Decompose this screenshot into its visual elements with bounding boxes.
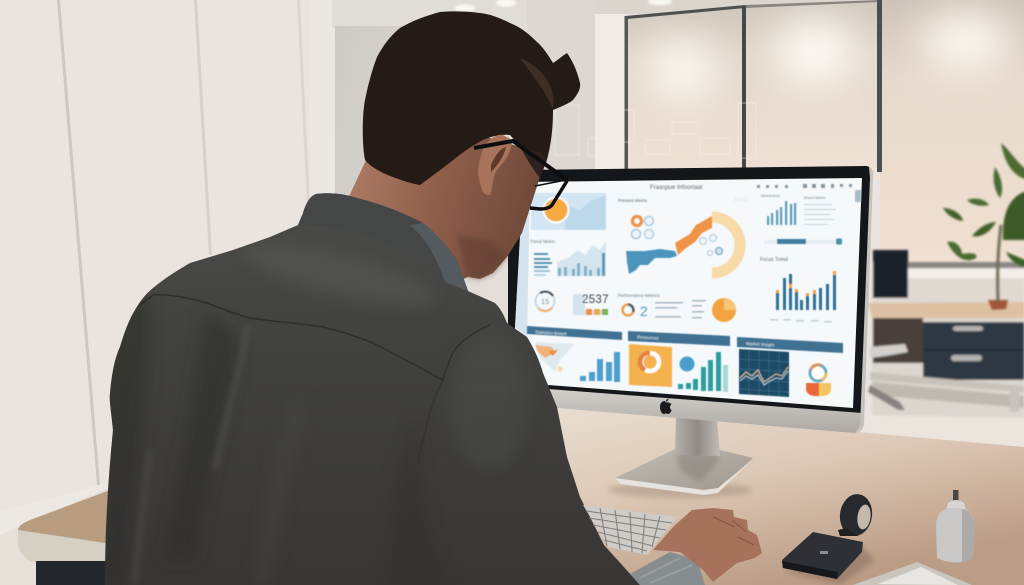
scrollbar	[855, 190, 861, 202]
glasses	[474, 141, 567, 209]
stand base	[615, 448, 753, 493]
icon: potted plant	[943, 143, 1024, 310]
panel: right stacked bar chart: Focus Trend	[760, 257, 788, 263]
desk surface	[18, 403, 1024, 585]
person	[105, 11, 705, 585]
ear	[478, 135, 512, 195]
device: dark power bank and ring stand	[782, 492, 875, 585]
left desk	[18, 490, 112, 548]
panel: orange donut and teal bars: Resources	[637, 335, 659, 341]
panel: central flow chart with ring: Present Meets	[618, 198, 648, 203]
panel: map and blue bars	[527, 326, 622, 382]
panel: top-right bar chart and progress	[761, 194, 842, 244]
hair	[363, 11, 580, 185]
stand neck	[675, 415, 720, 456]
panel: gauge and KPI number: 2537	[582, 294, 609, 306]
dashboard title: Fraaspue Infoortaat	[650, 185, 703, 191]
panel: right stacked bar chart	[760, 257, 836, 322]
panel: central flow chart with ring	[618, 197, 748, 274]
background room: desk, cabinet, monitor, chair	[868, 250, 1024, 448]
shirt shading folds	[105, 202, 424, 581]
panel: orange donut and teal bars	[628, 331, 730, 392]
sleeve cuff	[630, 552, 705, 585]
windows with dark frames	[624, 0, 1024, 270]
toolbar icons	[757, 184, 852, 188]
panel: map and blue bars: Statistics Board	[535, 330, 567, 336]
panel: top-right bar chart and progress: Brand Metric	[804, 196, 826, 200]
faint wireframe sketches on wall	[555, 103, 756, 158]
panel: top-left area chart	[531, 193, 606, 230]
panel: performance metrics row	[618, 293, 736, 322]
panel: dark line chart and donut: Market Insight	[746, 341, 775, 348]
monitor frame	[508, 166, 873, 433]
monitor stand	[608, 415, 753, 498]
panel: left trend chart	[530, 239, 606, 276]
panel: left trend chart: Trend Metric	[530, 239, 556, 244]
bottle	[936, 490, 974, 562]
panel: top-right bar chart and progress: Momentum	[761, 194, 780, 198]
monitor screen: dashboard	[515, 178, 862, 408]
shirt yoke seam	[140, 295, 443, 380]
shirt torso	[105, 193, 640, 585]
keyboard	[583, 505, 677, 555]
panel: dark line chart and donut	[737, 337, 843, 397]
panel: performance metrics row: Performance Metrics	[618, 293, 660, 298]
ceiling lights	[455, 0, 672, 12]
tablet at bottom edge	[853, 562, 972, 585]
ring stand	[837, 492, 875, 538]
panel: gauge and KPI number	[536, 292, 609, 315]
hand on mouse	[653, 508, 762, 582]
panel: performance metrics row: 2	[640, 303, 648, 319]
neck and face	[345, 135, 547, 290]
icon: apple logo	[660, 398, 672, 414]
collar	[298, 193, 468, 291]
panel: gauge and KPI number: 15	[541, 297, 549, 306]
